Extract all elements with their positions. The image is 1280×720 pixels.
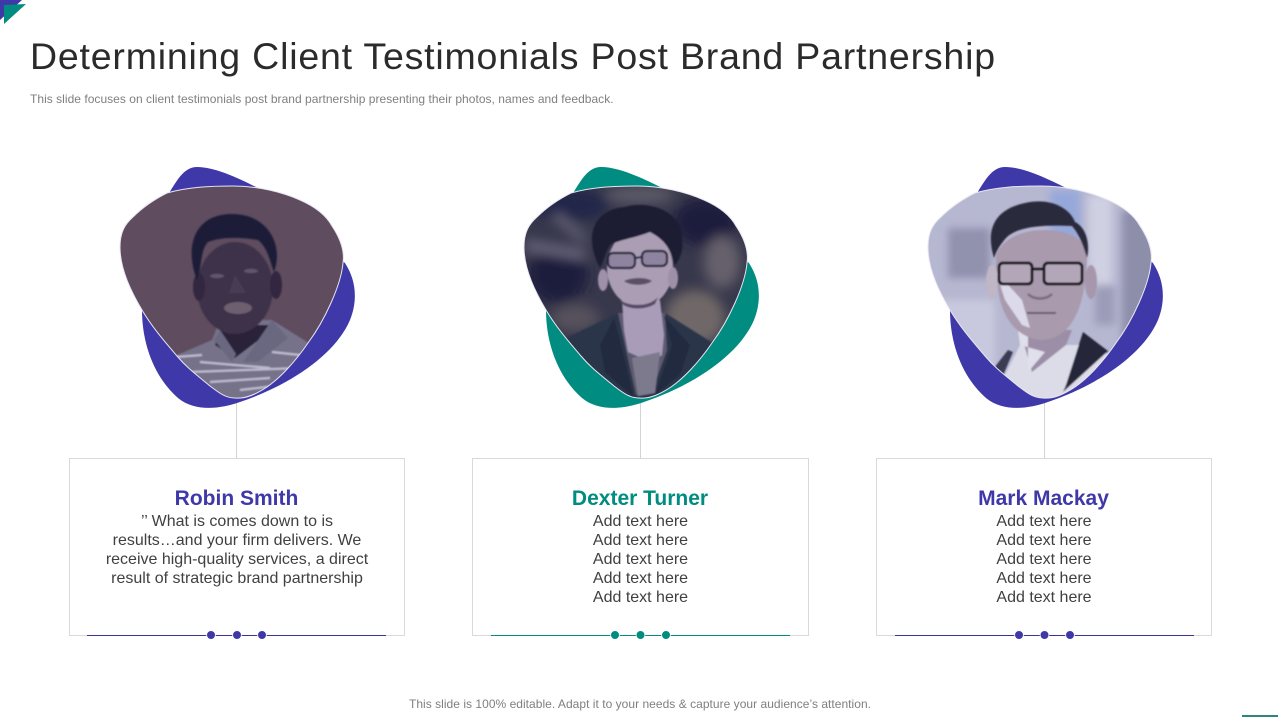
testimonial text: receive high-quality services, a direct	[106, 551, 368, 568]
testimonial text: results…and your firm delivers. We	[113, 532, 361, 549]
portrait: Dexter Turner	[524, 167, 759, 408]
testimonial text: Add text here	[593, 551, 688, 568]
connector: Mark Mackay	[1044, 399, 1045, 458]
decorative dotted line	[491, 631, 790, 639]
testimonial text	[593, 513, 688, 606]
title: Determining Client Testimonials Post Brand Partnership	[30, 35, 996, 77]
corner accent	[0, 0, 26, 24]
connector: Dexter Turner	[640, 399, 641, 458]
decorative dotted line	[87, 631, 386, 639]
portrait: Robin Smith	[120, 167, 355, 408]
connector: Robin Smith	[236, 399, 237, 458]
testimonial text: Add text here	[996, 513, 1092, 530]
testimonial text: ’’ What is comes down to is	[141, 513, 333, 530]
footer note: This slide is 100% editable. Adapt it to your needs & capture your audience’s attention.	[409, 697, 871, 711]
name: Dexter Turner: Dexter Turner	[572, 487, 708, 510]
panel: Robin Smith testimonial	[69, 458, 405, 636]
testimonial text: Add text here	[593, 570, 688, 587]
name: Mark Mackay: Mark Mackay	[978, 487, 1109, 510]
testimonial text	[106, 513, 368, 587]
testimonial text: Add text here	[593, 532, 688, 549]
testimonial text: Add text here	[996, 532, 1092, 549]
testimonial text: Add text here	[593, 589, 688, 606]
name: Robin Smith: Robin Smith	[175, 487, 298, 510]
panel: Mark Mackay testimonial	[876, 458, 1212, 636]
portrait: Mark Mackay	[928, 167, 1163, 408]
subtitle: This slide focuses on client testimonials post brand partnership presenting their photos, names and feedback.	[30, 92, 614, 106]
panel: Dexter Turner testimonial	[472, 458, 809, 636]
testimonial text	[996, 513, 1092, 606]
page marker	[1242, 715, 1278, 717]
testimonial text: Add text here	[996, 589, 1092, 606]
testimonial text: Add text here	[996, 570, 1092, 587]
decorative dotted line	[895, 631, 1194, 639]
testimonial text: Add text here	[593, 513, 688, 530]
testimonial text: Add text here	[996, 551, 1092, 568]
testimonial text: result of strategic brand partnership	[111, 570, 363, 587]
